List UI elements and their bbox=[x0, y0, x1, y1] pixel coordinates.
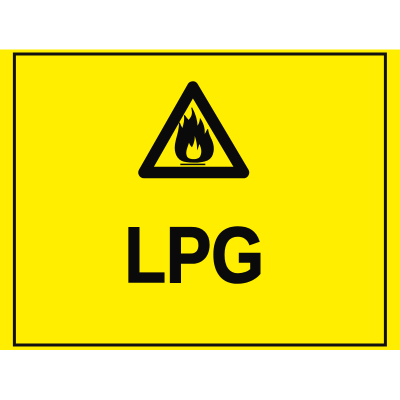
triangle outline bbox=[144, 87, 244, 172]
LPG heading: LPG bbox=[124, 210, 264, 299]
black sign border bbox=[14, 54, 385, 345]
icon: flame bbox=[175, 108, 213, 165]
icon: flammable warning triangle bbox=[144, 87, 244, 172]
yellow sign panel bbox=[0, 50, 400, 350]
